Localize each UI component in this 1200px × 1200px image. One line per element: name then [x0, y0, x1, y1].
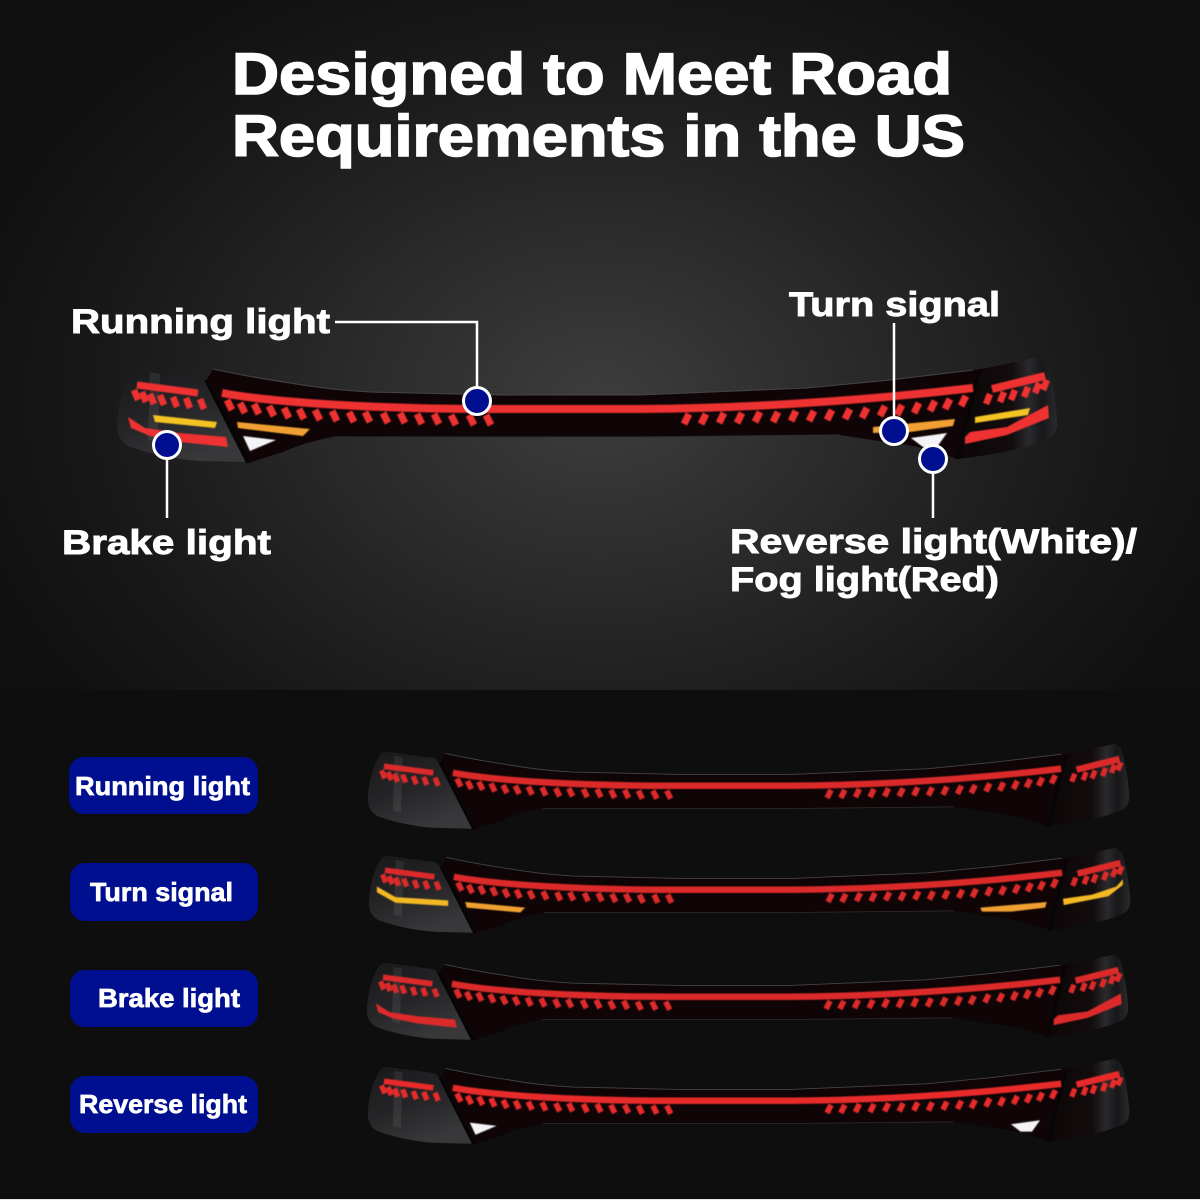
pill: brake light [70, 970, 258, 1027]
lamp: turn signal lit [369, 848, 1130, 934]
pill: reverse light [70, 1076, 258, 1133]
title: Designed to Meet Road [232, 42, 952, 107]
title [232, 42, 965, 169]
leader lines [167, 322, 933, 518]
label: running light: Running light [71, 303, 330, 341]
row: brake light [70, 955, 1128, 1041]
marker: running light [464, 388, 490, 414]
label: reverse and fog light: Fog light(Red) [730, 561, 999, 599]
label: brake light: Brake light [62, 524, 271, 562]
background: bottom dark panel [0, 690, 1200, 1200]
row: reverse light [70, 1059, 1129, 1145]
pill: running light [69, 757, 258, 814]
row: turn signal [70, 848, 1130, 934]
label: reverse and fog light: Reverse light(White)/ [730, 523, 1138, 561]
pill: turn signal [70, 863, 258, 921]
pill: reverse light: Reverse light [79, 1089, 247, 1119]
marker: reverse and fog light [920, 446, 946, 472]
lamp: brake light lit [367, 955, 1128, 1041]
background: top gradient panel [0, 0, 1200, 690]
marker: brake light [154, 432, 180, 458]
title: Requirements in the US [232, 104, 965, 169]
lamp: reverse light lit [368, 1059, 1129, 1145]
pill: brake light: Brake light [98, 983, 240, 1013]
row: running light [69, 744, 1129, 830]
label: turn signal: Turn signal [789, 286, 1000, 324]
label: reverse and fog light [730, 523, 1138, 599]
marker: turn signal [880, 418, 908, 444]
pill: turn signal: Turn signal [90, 877, 233, 907]
lamp: running light lit [368, 744, 1129, 830]
main tail light assembly [117, 357, 1057, 463]
pill: running light: Running light [75, 771, 250, 801]
